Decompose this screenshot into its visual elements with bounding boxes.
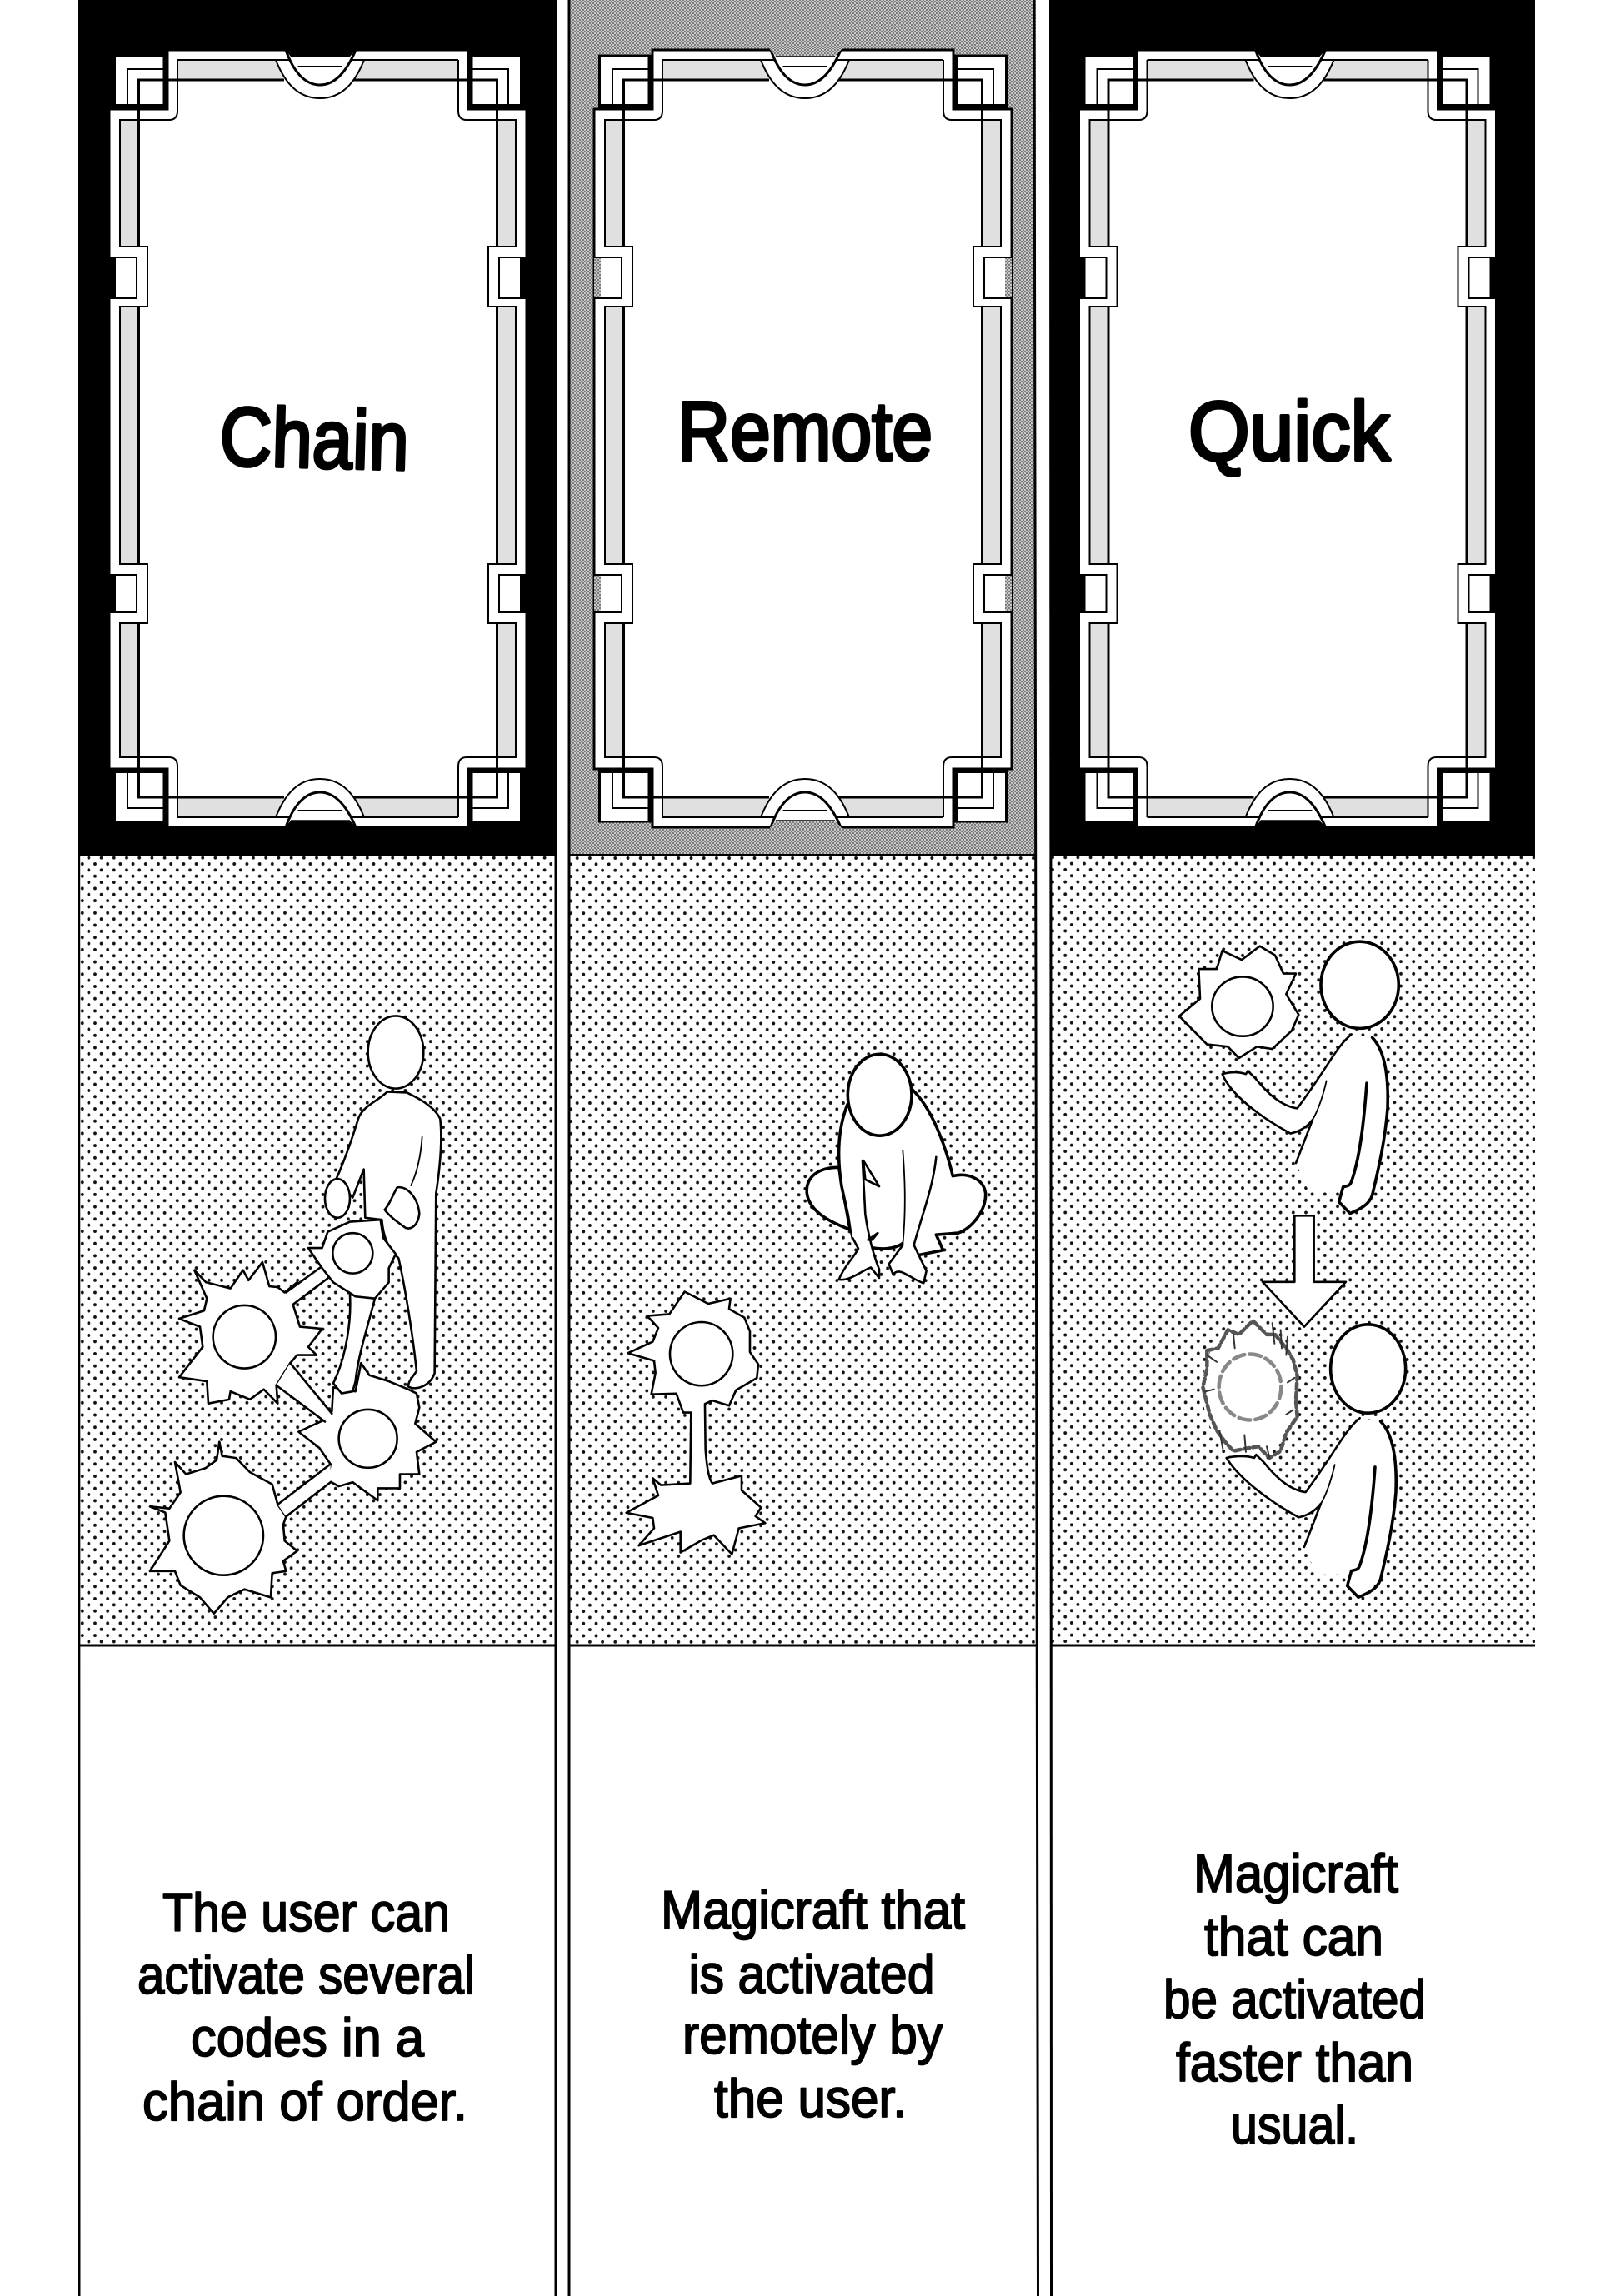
burst 2 [298, 1363, 436, 1500]
sharp burst [1179, 946, 1298, 1058]
lower figure [1227, 1325, 1406, 1597]
black header background [1050, 0, 1535, 854]
text block: Quick description [1163, 1843, 1426, 2155]
ornate frame [594, 48, 1012, 829]
right arm [889, 1150, 936, 1283]
right knee [894, 1175, 986, 1255]
panel: Remote [569, 0, 1038, 2296]
burst 3 [150, 1442, 298, 1614]
connectors between bursts [277, 1266, 332, 1516]
left knee [807, 1167, 850, 1230]
text block: Remote description: Magicraft that [661, 1879, 965, 1940]
upper figure [1222, 941, 1398, 1214]
upper burst with stem and lower burst [627, 1292, 765, 1555]
illustration: figure activating chained codes [150, 1016, 441, 1614]
text block: Quick description: usual. [1231, 2094, 1358, 2155]
arm gap triangle [863, 1160, 879, 1186]
text block: Remote description: is activated [688, 1944, 935, 2004]
head [848, 1054, 912, 1136]
person left leg [333, 1295, 375, 1394]
blurred burst [1202, 1320, 1298, 1458]
ornate frame [1078, 48, 1497, 829]
panel: Quick [1050, 0, 1535, 2296]
torso [839, 1090, 952, 1252]
text block: Chain description: chain of order. [142, 2071, 468, 2132]
panel: Chain [78, 0, 556, 2296]
black header background [78, 0, 556, 854]
text block: Remote description: the user. [714, 2068, 907, 2129]
arrow: down [1262, 1215, 1346, 1327]
text block: Remote description: remotely by [682, 2004, 942, 2065]
illustration: crouching figure with remote codes [627, 1054, 986, 1555]
halftone background [570, 856, 1037, 1645]
text block: Quick description: be activated [1163, 1969, 1426, 2029]
burst 1 [179, 1262, 322, 1404]
heading: Remote: Remote [678, 385, 932, 478]
text block: Remote description [661, 1879, 965, 2129]
text block: Quick description: faster than [1176, 2032, 1413, 2093]
text block: Chain description [138, 1882, 475, 2132]
illustration: quick activation sequence [1179, 941, 1406, 1597]
left arm [839, 1160, 879, 1280]
small burst [308, 1220, 396, 1299]
gray header background [569, 0, 1036, 854]
halftone background [1051, 856, 1535, 1645]
heading: Quick: Quick [1188, 385, 1391, 478]
person body [336, 1092, 441, 1388]
ornate frame [109, 48, 527, 829]
text block: Chain description: codes in a [191, 2007, 425, 2068]
hands and head [325, 1179, 350, 1218]
text block: Quick description: Magicraft [1193, 1843, 1398, 1904]
text block: Chain description: The user can [162, 1882, 450, 1943]
text block: Quick description: that can [1204, 1906, 1383, 1967]
heading: Chain: Chain [218, 390, 410, 488]
halftone background [78, 856, 556, 1645]
burst circles [213, 1305, 276, 1369]
text block: Chain description: activate several [138, 1944, 475, 2005]
